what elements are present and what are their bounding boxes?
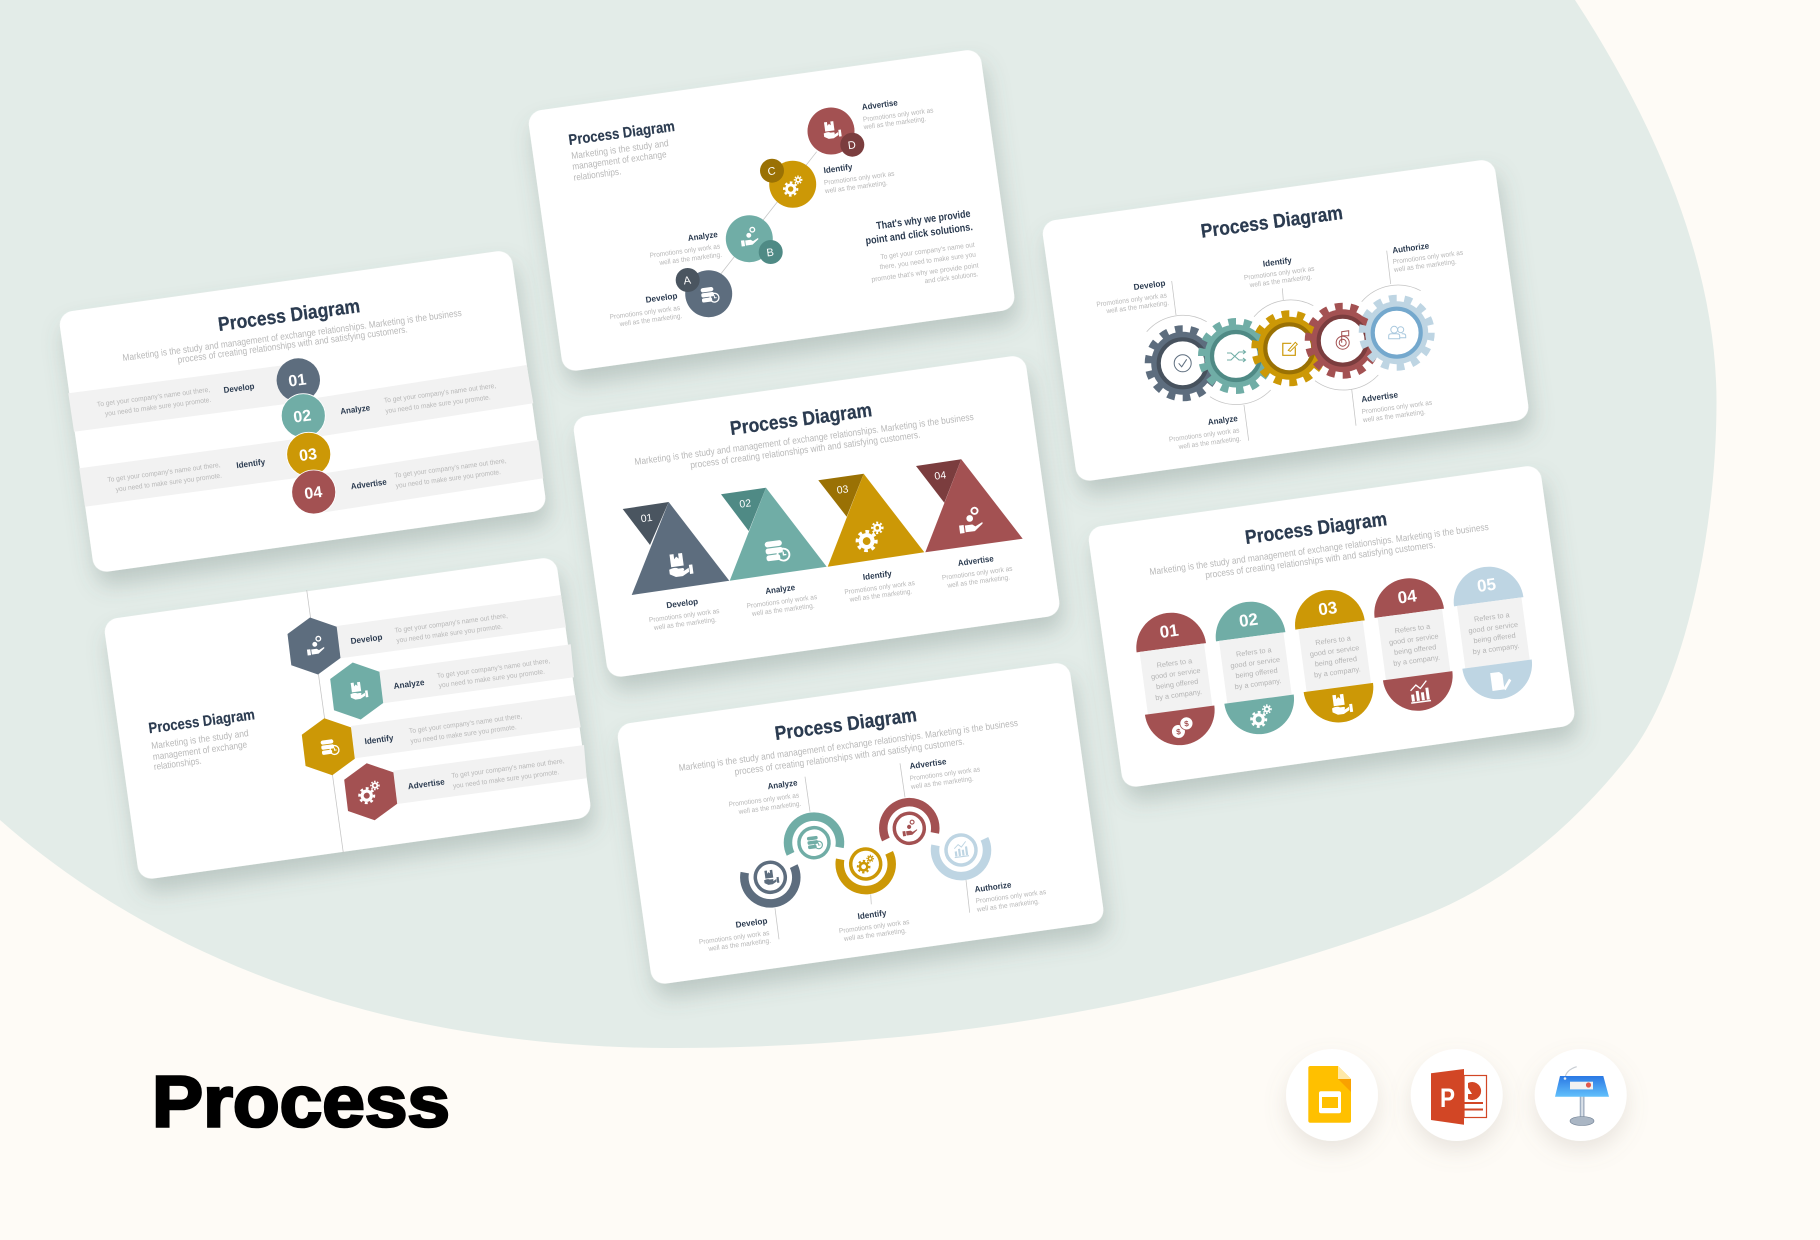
callout arcs and leader lines (1147, 251, 1421, 441)
heading: Process Diagram (217, 295, 361, 336)
label: Analyze: To get your company's name out there, (437, 658, 551, 680)
step B (726, 215, 783, 264)
arc: gold (838, 846, 895, 893)
label: Analyze: Promotions only work as (1169, 427, 1240, 444)
label: Analyze: Analyze (767, 777, 798, 791)
label: Authorize: well as the marketing. (976, 898, 1040, 914)
panel: gears (1041, 158, 1530, 482)
step 04 circle: 04 (303, 484, 323, 503)
label: Identify: Identify (1262, 255, 1293, 269)
pill 05: being offered (1473, 631, 1516, 645)
intro text (151, 728, 249, 773)
label: Authorize: Authorize (1392, 240, 1430, 255)
label: Analyze (393, 658, 551, 691)
step C: C (767, 165, 776, 178)
leader lines (775, 763, 970, 939)
label: Develop: Develop (666, 596, 699, 610)
pill 04 (1370, 574, 1457, 715)
step A: A (683, 275, 692, 287)
label: Advertise (861, 97, 934, 131)
intro text: Marketing is the study and management of exchange relationships. Marketing is the business (634, 412, 975, 468)
step 01 circle: 01 (287, 371, 307, 391)
label: Authorize: well as the marketing. (1393, 259, 1457, 274)
panel: numbered circles (58, 249, 547, 573)
heading: Process Diagram (729, 399, 873, 440)
heading: Process Diagram (1244, 508, 1388, 549)
title: Process: Process (152, 1063, 450, 1143)
label: Advertise: Promotions only work as (909, 766, 981, 783)
label: Analyze: Analyze (1207, 413, 1239, 427)
pill 01: 01 (1158, 621, 1180, 642)
gear: slate (1148, 329, 1217, 398)
label: Advertise: Promotions only work as (942, 566, 1013, 582)
pill 01 (1132, 608, 1219, 749)
gray bands (337, 595, 587, 804)
label: Analyze: Promotions only work as (649, 243, 721, 260)
triangle 01: 01 (640, 512, 653, 525)
label: Identify (107, 457, 266, 494)
label: Identify: To get your company's name out there, (107, 462, 221, 484)
label: Advertise: Advertise (957, 553, 994, 568)
step 02 circle (281, 394, 325, 438)
label: Analyze (728, 777, 802, 816)
label: Develop: you need to make sure you promote. (105, 397, 212, 418)
label: Analyze: Analyze (393, 677, 425, 691)
step 02 circle: 02 (292, 407, 312, 427)
label: Develop: Promotions only work as (649, 608, 720, 624)
panel: pills (1087, 464, 1576, 788)
label: Identify (823, 162, 895, 195)
triangle 03 (818, 474, 924, 567)
intro text: relationships. (153, 756, 202, 773)
pill 02: being offered (1235, 666, 1278, 680)
label: Authorize: Promotions only work as (975, 889, 1047, 905)
label: Advertise: To get your company's name out there, (451, 758, 565, 780)
triangle 04: 04 (934, 469, 947, 483)
label: Analyze: Promotions only work as (728, 792, 800, 809)
pill 04: by a company. (1393, 653, 1440, 668)
label: Identify: Promotions only work as (824, 171, 895, 187)
label: Identify: Identify (857, 908, 887, 921)
label: Analyze: well as the marketing. (737, 801, 802, 816)
pill 01: $ (1184, 719, 1190, 729)
label: Develop: To get your company's name out there, (97, 387, 211, 409)
step D: D (847, 139, 857, 152)
label: Advertise: well as the marketing. (946, 574, 1010, 590)
pill 02: good or service (1230, 655, 1280, 670)
heading: Process Diagram (773, 704, 918, 745)
triangle 03: 03 (836, 483, 849, 497)
pill 01: by a company. (1155, 687, 1202, 702)
label: Identify: Promotions only work as (1244, 266, 1315, 282)
icon: Keynote (1535, 1049, 1627, 1141)
pill 02: 02 (1238, 610, 1259, 631)
intro text: relationships. (573, 166, 622, 184)
label: Develop: Promotions only work as (1096, 292, 1168, 309)
label: Advertise: Advertise (350, 477, 387, 491)
intro text: Marketing is the study and (151, 728, 249, 752)
label: Analyze: Promotions only work as (746, 594, 818, 610)
label: Identify: Identify (364, 733, 394, 746)
callout text: promote that's why we provide point (871, 262, 979, 284)
intro text: Marketing is the study and management of exchange relationships. Marketing is the business (678, 718, 1019, 774)
pill 02: Refers to a (1235, 645, 1273, 659)
label: Analyze: well as the marketing. (1177, 436, 1242, 451)
hexagon 1 (288, 618, 340, 674)
arc: slate (743, 859, 800, 907)
label: Analyze (340, 383, 497, 416)
label: Advertise (942, 553, 1013, 590)
pill 01: $ (1176, 727, 1182, 737)
label: Develop: Develop (735, 916, 768, 930)
label: Develop: Develop (1133, 278, 1166, 292)
gear: gold (1255, 314, 1324, 383)
pill 05: 05 (1476, 575, 1497, 596)
step 04 circle (292, 470, 336, 514)
label: Identify: Promotions only work as (844, 580, 916, 596)
intro text: process of creating relationships with and satisfying customers. (734, 736, 965, 778)
label: Authorize (974, 879, 1047, 914)
callout text (865, 208, 979, 285)
label: Develop: Promotions only work as (699, 930, 770, 946)
label: Identify: To get your company's name out there, (409, 713, 523, 735)
label: Develop (350, 613, 508, 646)
label: Identify: well as the marketing. (1248, 274, 1313, 289)
label: Analyze: To get your company's name out there, (384, 383, 497, 405)
background blob (0, 0, 1716, 1048)
pill 05 (1449, 562, 1536, 703)
triangle 02 (721, 488, 827, 581)
label: Advertise: To get your company's name out there, (394, 458, 507, 480)
label: Advertise: you need to make sure you promote. (453, 769, 560, 790)
label: Identify (844, 568, 916, 604)
arc: red (880, 799, 937, 847)
panel: hexagons (103, 556, 592, 880)
hexagon 4 (344, 763, 397, 820)
label: Develop: well as the marketing. (653, 617, 717, 632)
connector line (720, 152, 817, 275)
gray bands (68, 363, 543, 513)
label: Advertise (407, 758, 565, 791)
label: Advertise: Advertise (909, 756, 947, 771)
intro text: process of creating relationships with and satisfying customers. (1205, 540, 1436, 581)
label: Identify (839, 908, 910, 943)
label: Advertise: well as the marketing. (1362, 409, 1426, 424)
label: Develop: Promotions only work as (609, 305, 681, 321)
pill 04: good or service (1388, 631, 1439, 647)
heading: Process Diagram (568, 118, 676, 149)
label: Develop: Develop (645, 291, 678, 305)
pill 01: being offered (1156, 677, 1199, 691)
label: Advertise: Advertise (861, 97, 898, 112)
pill 05: Refers to a (1473, 610, 1511, 624)
label: Advertise: you need to make sure you promote. (395, 469, 501, 490)
callout text: That's why we provide (876, 208, 971, 232)
label: Analyze: you need to make sure you promote. (385, 394, 491, 415)
step 03 circle: 03 (298, 446, 318, 465)
pill 04: Refers to a (1394, 622, 1432, 635)
triangle 04 (916, 459, 1023, 552)
label: Identify (1244, 255, 1315, 289)
label: Analyze: well as the marketing. (751, 603, 815, 618)
label: Analyze (746, 582, 818, 618)
label: Identify: you need to make sure you promote. (410, 724, 517, 745)
timeline line (307, 590, 343, 853)
gear: light blue (1362, 298, 1431, 367)
triangle 02: 02 (739, 497, 752, 511)
callout text: there, you need to make sure you (879, 252, 977, 271)
pill 03: 03 (1317, 598, 1338, 619)
label: Identify: Identify (862, 568, 893, 582)
pill 01: Refers to a (1156, 656, 1194, 670)
intro text: process of creating relationships with and satisfying customers. (177, 324, 408, 366)
label: Develop (97, 381, 255, 418)
hexagon 3 (302, 718, 355, 775)
pill 03: by a company. (1313, 664, 1361, 680)
label: Authorize: Promotions only work as (1392, 250, 1464, 266)
intro text: management of exchange (572, 149, 667, 173)
pill 03 (1291, 586, 1378, 727)
panel: arcs (616, 661, 1105, 985)
label: Analyze: Analyze (765, 582, 796, 596)
panel: triangles (572, 354, 1061, 678)
label: Advertise: Promotions only work as (863, 107, 934, 124)
label: Authorize: Authorize (974, 879, 1012, 894)
label: Identify: well as the marketing. (824, 180, 888, 195)
step A (676, 268, 732, 317)
label: Analyze (649, 229, 722, 267)
pill 03: being offered (1314, 654, 1357, 669)
callout text: To get your company's name out (880, 242, 975, 261)
label: Advertise: well as the marketing. (910, 776, 974, 791)
label: Develop: well as the marketing. (1105, 300, 1169, 315)
label: Develop: well as the marketing. (618, 313, 683, 328)
label: Identify (364, 713, 523, 746)
intro text (571, 138, 669, 184)
pill 02: by a company. (1234, 676, 1282, 691)
pill 05: by a company. (1472, 641, 1520, 656)
arc: light blue (933, 832, 990, 879)
arc: teal (785, 813, 842, 861)
hexagon 2 (330, 662, 383, 720)
label: Develop (1096, 278, 1169, 315)
label: Authorize (1392, 240, 1464, 274)
label: Develop: To get your company's name out there, (394, 613, 508, 635)
intro text: Marketing is the study and management of exchange relationships. Marketing is the business (122, 308, 463, 364)
label: Identify: you need to make sure you promote. (115, 473, 222, 494)
gear: red (1308, 306, 1377, 375)
label: Analyze: Analyze (340, 402, 371, 416)
pill 03: good or service (1309, 643, 1360, 659)
label: Develop (649, 596, 720, 632)
pill 04: being offered (1394, 642, 1437, 657)
heading: Process Diagram (148, 706, 256, 737)
label: Advertise (1361, 389, 1433, 424)
step D (808, 108, 864, 157)
pill 05: good or service (1468, 620, 1518, 635)
label: Develop: you need to make sure you promote. (396, 624, 503, 645)
label: Develop: Develop (223, 381, 255, 395)
intro text: process of creating relationships with and satisfying customers. (690, 430, 921, 471)
label: Develop (609, 291, 683, 328)
label: Develop (699, 916, 771, 953)
panel: lettered circles (527, 48, 1016, 372)
label: Advertise: well as the marketing. (862, 116, 927, 131)
label: Identify: well as the marketing. (843, 928, 907, 943)
callout text: and click solutions. (924, 271, 979, 285)
icon: PowerPoint (1411, 1049, 1503, 1141)
icon: Google Slides (1286, 1049, 1378, 1141)
icon: PowerPoint: P (1440, 1083, 1455, 1113)
label: Identify: Identify (236, 457, 266, 470)
label: Analyze: you need to make sure you promote. (438, 669, 545, 690)
label: Analyze: Analyze (687, 229, 719, 243)
heading: Process Diagram (1199, 202, 1344, 243)
label: Advertise (350, 458, 507, 491)
label: Advertise: Advertise (1361, 389, 1399, 404)
label: Advertise: Promotions only work as (1361, 400, 1433, 416)
label: Identify: Identify (823, 162, 853, 175)
intro text: Marketing is the study and management of exchange relationships. Marketing is the business (1149, 522, 1490, 578)
pill 01: good or service (1150, 666, 1201, 681)
step 01 circle (277, 358, 320, 402)
label: Identify: well as the marketing. (848, 588, 913, 604)
label: Analyze: well as the marketing. (658, 252, 722, 267)
step B: B (766, 247, 775, 259)
label: Analyze (1169, 413, 1242, 451)
step C (760, 159, 816, 208)
label: Develop: well as the marketing. (707, 938, 771, 953)
pill 02 (1211, 597, 1298, 738)
gear: teal (1202, 322, 1270, 390)
pill 04: 04 (1396, 586, 1418, 608)
label: Identify: Promotions only work as (839, 919, 910, 935)
intro text: Marketing is the study and (571, 138, 669, 162)
pill 03: Refers to a (1315, 633, 1352, 647)
label: Advertise (909, 756, 981, 791)
step 03 circle (287, 432, 331, 476)
triangle 01 (623, 502, 729, 595)
intro text: management of exchange (152, 740, 248, 763)
callout text: point and click solutions. (865, 221, 974, 247)
label: Advertise: Advertise (407, 776, 445, 791)
label: Develop: Develop (350, 632, 383, 646)
